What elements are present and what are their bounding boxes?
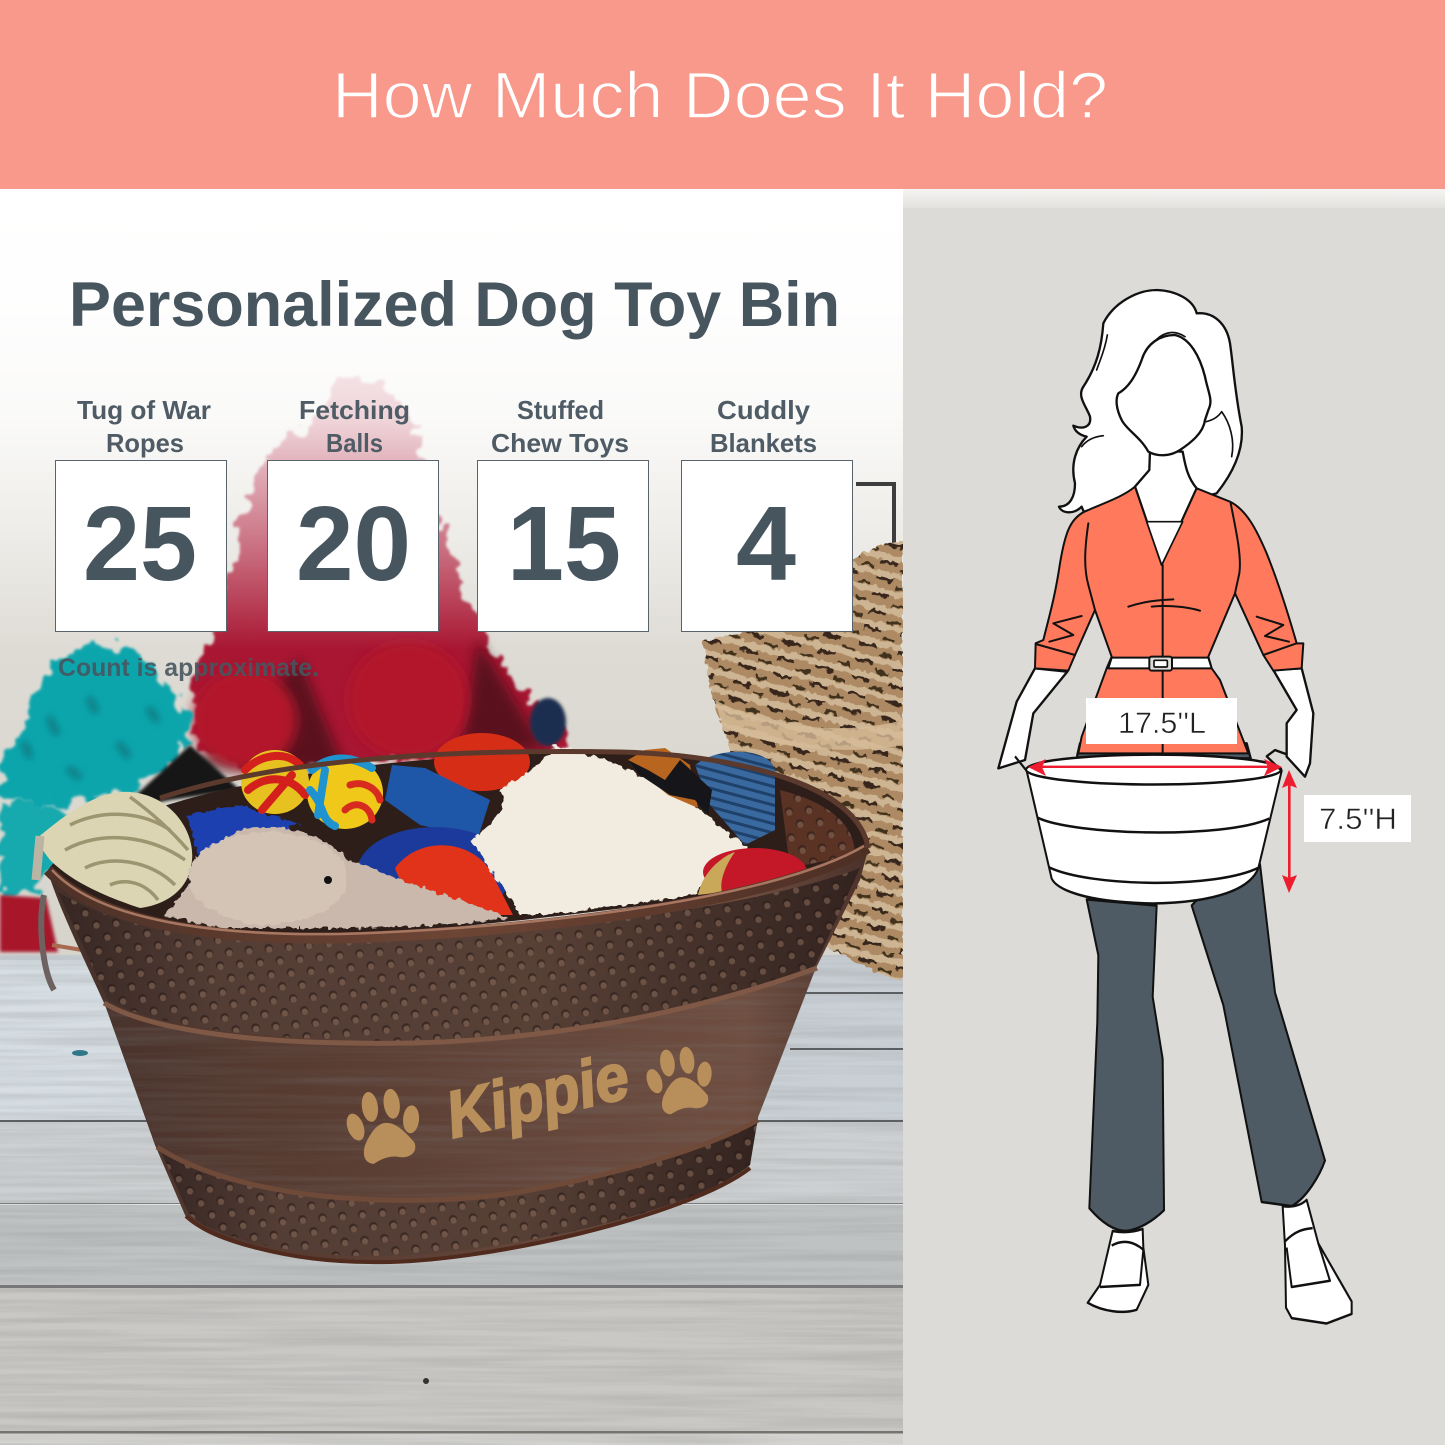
woman figure: upper body [998, 290, 1313, 777]
fox plush [628, 748, 712, 815]
tennis ball [698, 848, 807, 896]
hands and forearms [998, 668, 1067, 768]
stat: cuddly blankets: 4 [736, 485, 796, 603]
stat: fetching balls [268, 395, 438, 632]
diagram tub [1015, 750, 1287, 904]
wooden floor [0, 955, 903, 1445]
stat: stuffed chew toys: Chew Toys [491, 428, 629, 458]
blue bone toy [385, 765, 490, 838]
belt [1108, 658, 1212, 668]
icon: paw right [646, 1046, 712, 1114]
panel: product photo [0, 375, 903, 1445]
bin body [48, 850, 868, 1262]
left handle [36, 836, 82, 990]
stat: tug of war ropes: Ropes [106, 428, 184, 458]
trousers waist [1077, 743, 1251, 758]
bin rim [48, 752, 868, 938]
label: height: 7.5''H [1319, 803, 1397, 836]
label: length: 17.5''L [1118, 707, 1206, 740]
label: length [1086, 698, 1237, 744]
icon: paw left [346, 1088, 419, 1164]
heading: product name: Personalized Dog Toy Bin [69, 270, 840, 340]
wicker basket [703, 482, 903, 982]
upper hammered band [58, 868, 860, 1041]
bunny plush [165, 827, 510, 928]
engraved name: Kippie [439, 1038, 636, 1152]
stat: fetching balls: Fetching [299, 395, 410, 425]
hair [1059, 290, 1242, 526]
lower hammered band [158, 1118, 758, 1256]
stat: cuddly blankets: Cuddly [717, 395, 811, 425]
blouse [1035, 487, 1303, 753]
white blanket [470, 745, 748, 915]
arrow: height [1282, 770, 1297, 893]
stat: stuffed chew toys [478, 395, 648, 632]
panel: size diagram [903, 189, 1445, 1445]
stat: tug of war ropes [56, 395, 226, 632]
footnote: Count is approximate. [58, 654, 319, 682]
multicolour rope toy [241, 750, 383, 829]
bin interior [48, 752, 868, 938]
label: height [1304, 795, 1411, 842]
face [1117, 335, 1210, 455]
stat: tug of war ropes: Tug of War [77, 395, 211, 425]
band ridges [104, 968, 817, 1262]
brushed metal grain [108, 972, 816, 1196]
woman figure: legs [1087, 864, 1352, 1323]
stat: stuffed chew toys: 15 [507, 485, 621, 603]
right trouser leg [1192, 864, 1325, 1206]
jester ball [357, 827, 513, 917]
stat: cuddly blankets: Blankets [710, 428, 817, 458]
toy bin [35, 733, 868, 1262]
header banner [0, 0, 1445, 189]
blurred pom-pom toys [0, 377, 566, 952]
right shoe [1283, 1200, 1352, 1323]
title: How Much Does It Hold? [332, 58, 1108, 132]
belt buckle [1149, 657, 1172, 671]
blue bumpy toy [186, 805, 300, 860]
white fade overlay [0, 189, 903, 650]
stat: tug of war ropes: 25 [83, 485, 197, 603]
rope ball [35, 792, 192, 908]
stat: cuddly blankets [682, 395, 852, 632]
undershirt [1147, 522, 1183, 565]
blouse seams [1036, 503, 1297, 753]
stat: fetching balls: Balls [326, 428, 383, 458]
red ball [434, 733, 530, 791]
left shoe [1088, 1229, 1148, 1312]
toys [35, 733, 807, 928]
stat: fetching balls: 20 [296, 485, 411, 603]
neck [1135, 450, 1197, 565]
left trouser leg [1087, 899, 1164, 1231]
blue rope toy [695, 752, 775, 845]
stat: stuffed chew toys: Stuffed [517, 395, 604, 425]
arrow: length [1028, 759, 1282, 776]
